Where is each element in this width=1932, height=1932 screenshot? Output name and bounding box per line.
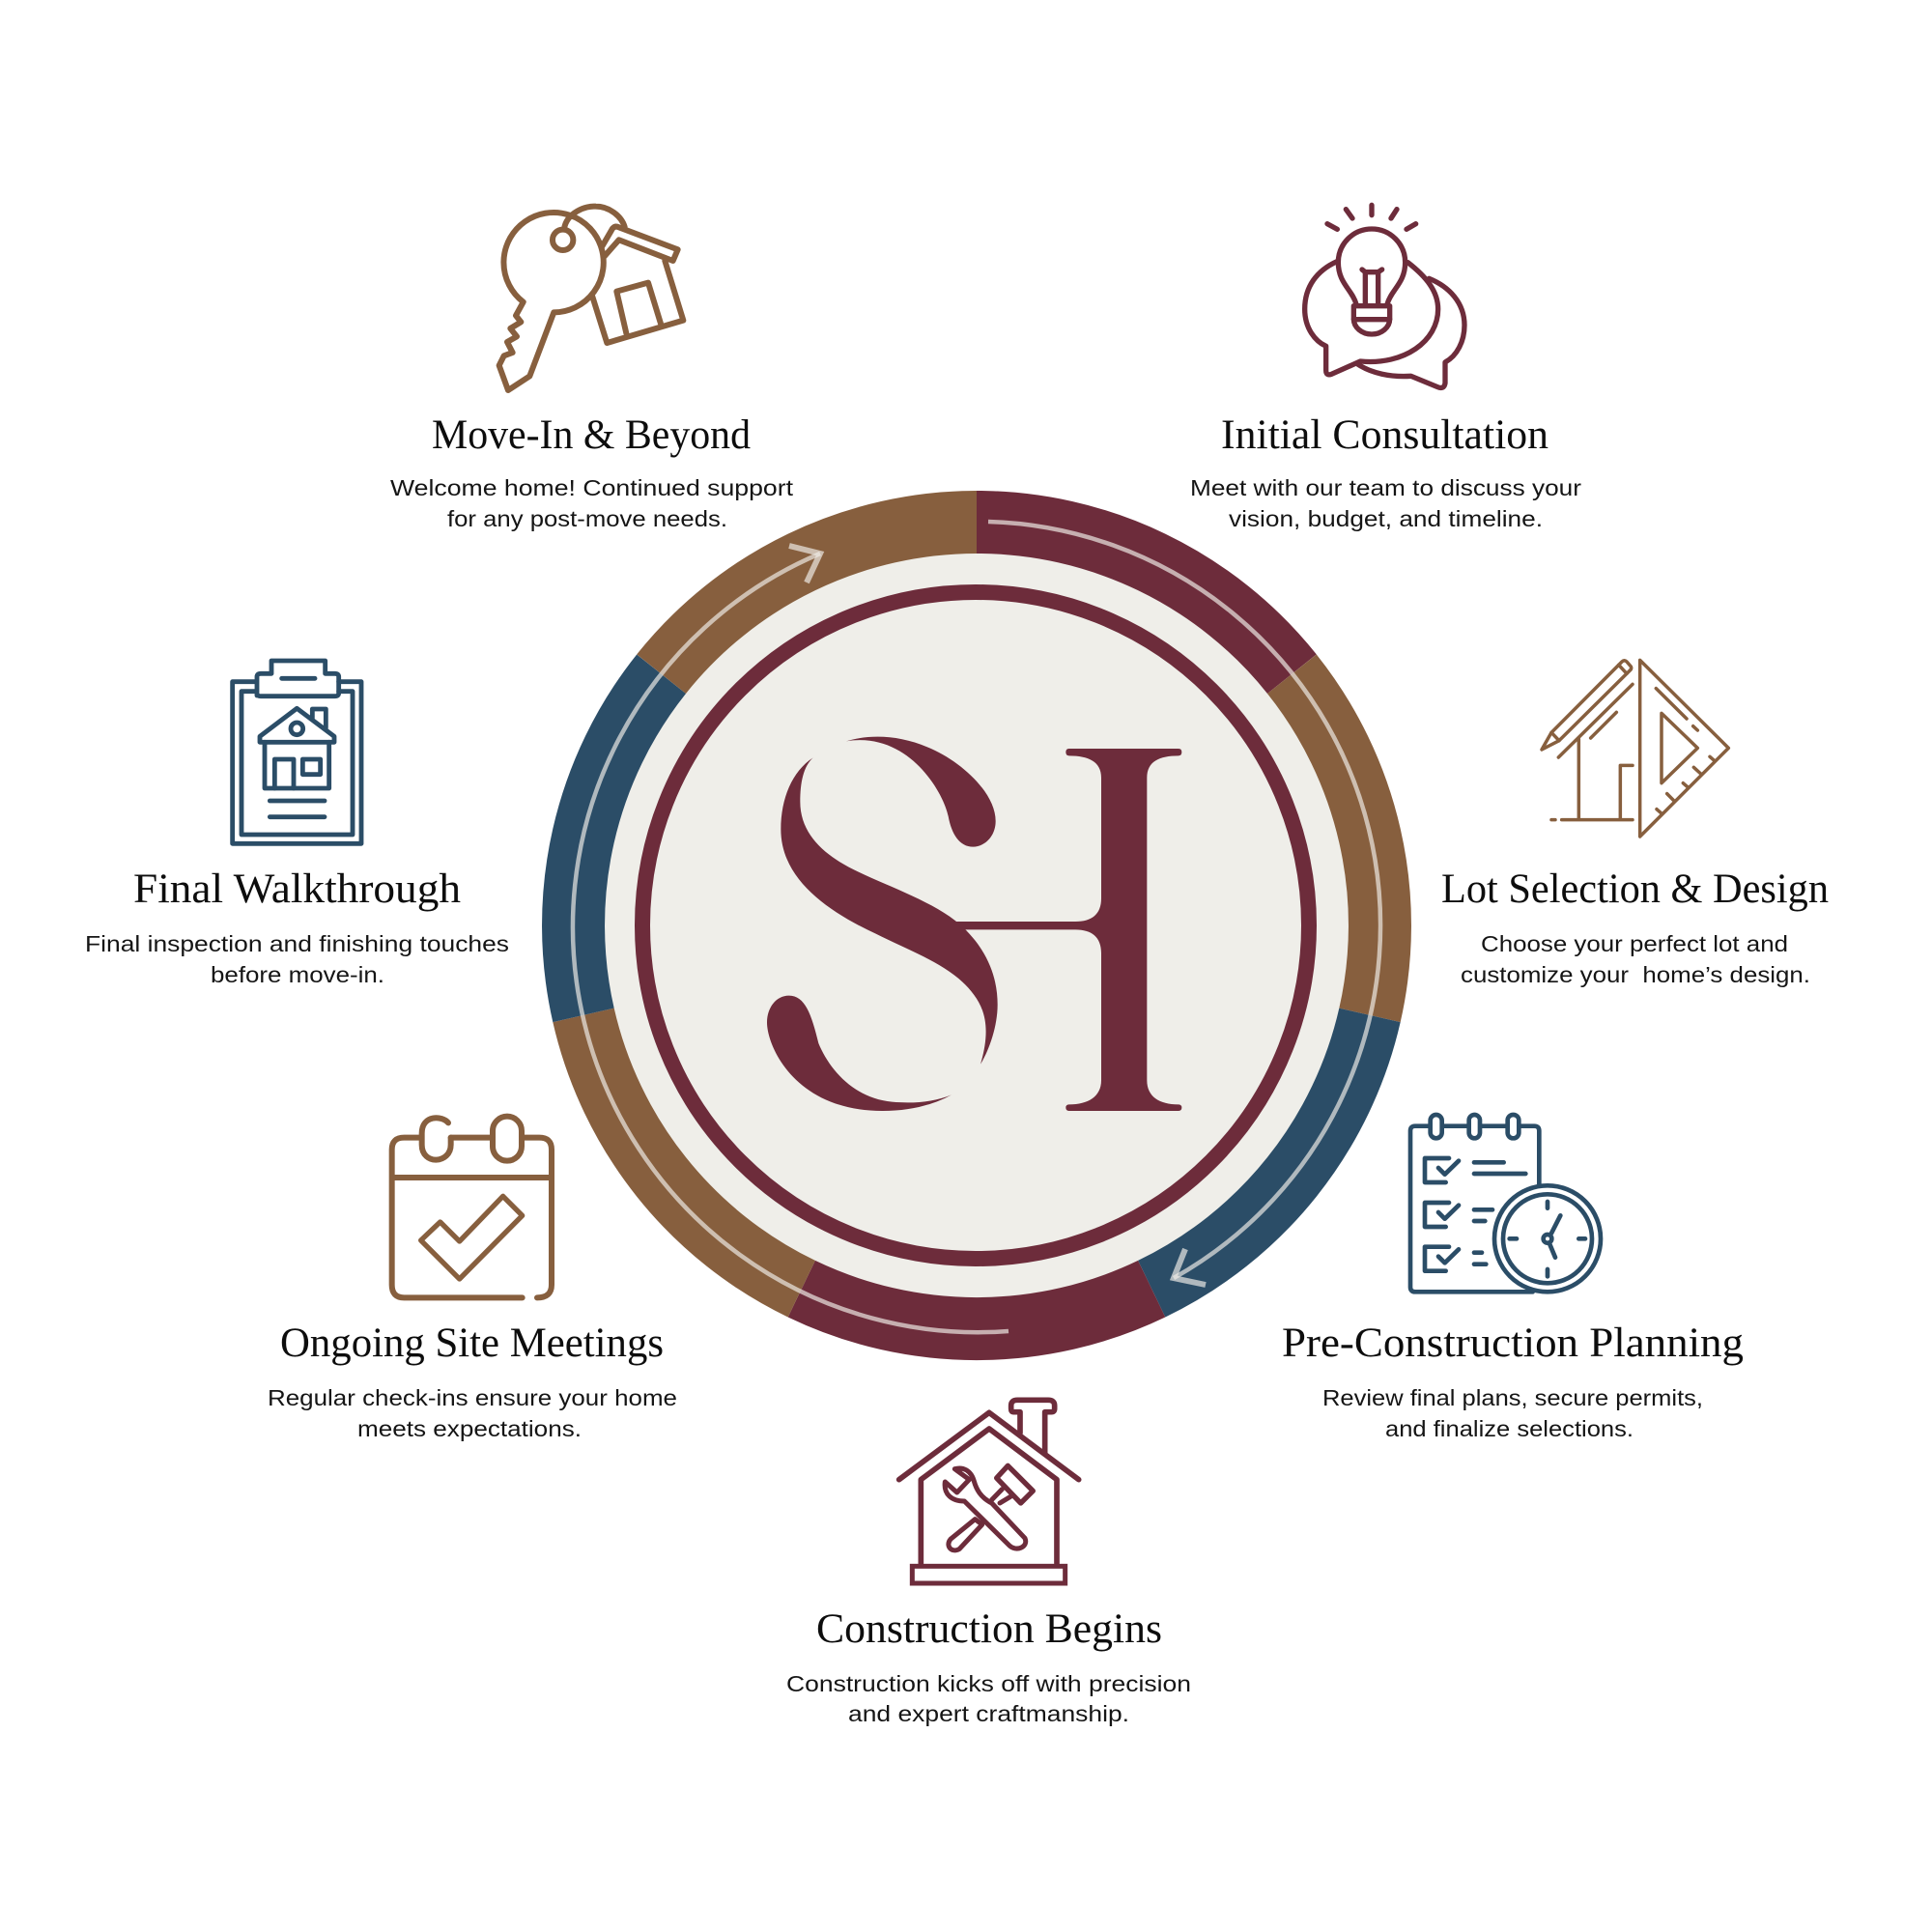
description: Regular check-ins ensure your home [268,1385,677,1410]
step: Pre-Construction Planning [1282,1115,1744,1441]
heading: Initial Consultation [1221,412,1548,458]
heading: Move-In & Beyond [432,412,751,458]
segmented ring [574,522,1379,1329]
description: and expert craftmanship. [848,1701,1129,1726]
icon: house keys [499,207,683,390]
description [85,931,509,987]
step: Ongoing Site Meetings [268,1117,677,1441]
arrow: right side clockwise [988,522,1380,1285]
description [786,1671,1191,1726]
description: Final inspection and finishing touches [85,931,509,956]
icon: clipboard with house [233,661,361,843]
description: meets expectations. [357,1416,582,1441]
heading: Pre-Construction Planning [1282,1321,1744,1366]
heading: Lot Selection & Design [1441,867,1829,912]
description: Welcome home! Continued support [390,475,794,500]
description: before move-in. [211,962,384,987]
cream disc [604,553,1350,1298]
description: Choose your perfect lot and [1481,931,1788,956]
icon: light bulb and speech bubbles [1305,205,1464,387]
heading: Final Walkthrough [133,867,461,912]
step: Final Walkthrough [85,661,509,987]
step: Initial Consultation [1190,205,1581,531]
description: and finalize selections. [1385,1416,1634,1441]
heading: Construction Begins [816,1606,1162,1652]
description [1322,1385,1703,1441]
description [268,1385,677,1441]
icon: pencil, house plan and set square [1542,660,1728,837]
icon: house with tools [899,1400,1079,1583]
icon: calendar with check [392,1117,552,1297]
description: customize your home’s design. [1461,962,1810,987]
heading: Ongoing Site Meetings [280,1321,664,1366]
description: Review final plans, secure permits, [1322,1385,1703,1410]
step: Construction Begins [786,1400,1191,1726]
step: Move-In & Beyond [390,207,794,531]
description: Construction kicks off with precision [786,1671,1191,1696]
description [1461,931,1810,987]
icon: checklist and clock [1410,1115,1601,1292]
arrow: left side clockwise [573,546,1009,1332]
description [1190,475,1581,531]
central wheel [573,522,1380,1332]
description: for any post-move needs. [447,506,727,531]
description [390,475,794,531]
description: vision, budget, and timeline. [1229,506,1543,531]
inner maroon ring [642,592,1309,1259]
SH monogram [767,737,1181,1111]
description: Meet with our team to discuss your [1190,475,1581,500]
step: Lot Selection & Design [1441,660,1829,987]
